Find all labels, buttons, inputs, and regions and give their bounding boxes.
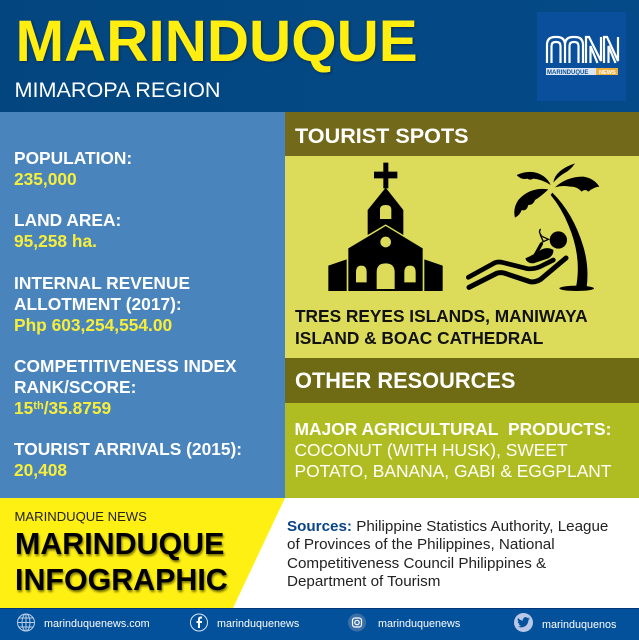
- heading: tourist spots: TOURIST SPOTS: [295, 123, 469, 148]
- panel: other resources: [285, 403, 639, 498]
- icon: instagram: [348, 614, 366, 632]
- agricultural products text: COCONUT (WITH HUSK), SWEET: [294, 440, 568, 460]
- icon: globe: [17, 614, 35, 632]
- internal revenue allotment stat: INTERNAL REVENUE: [14, 273, 190, 293]
- instagram handle: marinduquenews: [378, 618, 460, 630]
- land area stat: 95,258 ha.: [14, 231, 97, 251]
- agricultural products text: [294, 419, 612, 481]
- banner title: [15, 527, 229, 597]
- header band: [0, 0, 639, 112]
- heading: other resources: [285, 358, 639, 403]
- land area stat: [14, 210, 121, 251]
- website: marinduquenews.com: [44, 618, 150, 630]
- twitter handle: marinduquenos: [542, 619, 616, 631]
- tourist arrivals stat: [14, 439, 242, 480]
- sources text: Department of Tourism: [287, 573, 440, 590]
- competitiveness index stat: COMPETITIVENESS INDEX: [14, 356, 237, 376]
- icon: facebook: [190, 614, 208, 632]
- competitiveness index stat: RANK/SCORE:: [14, 377, 136, 397]
- tourist spots text: ISLAND & BOAC CATHEDRAL: [295, 328, 543, 348]
- banner kicker: MARINDUQUE NEWS: [14, 509, 147, 524]
- footer: [0, 608, 639, 640]
- population stat: POPULATION:: [14, 148, 132, 168]
- agricultural products text: MAJOR AGRICULTURAL PRODUCTS:: [294, 419, 611, 439]
- population stat: [14, 148, 132, 189]
- panel: tourist spots: [285, 156, 639, 358]
- internal revenue allotment stat: ALLOTMENT (2017):: [14, 294, 182, 314]
- title: MARINDUQUE: [16, 9, 418, 74]
- tourist arrivals stat: 20,408: [14, 460, 67, 480]
- heading: tourist spots: [285, 112, 639, 156]
- logo: [537, 12, 626, 101]
- subtitle: MIMAROPA REGION: [14, 77, 220, 102]
- population stat: 235,000: [14, 169, 77, 189]
- sources text: Competitiveness Council Philippines &: [287, 555, 546, 572]
- sources text: [287, 518, 608, 590]
- banner: infographic label: [0, 498, 285, 608]
- agricultural products text: POTATO, BANANA, GABI & EGGPLANT: [294, 461, 611, 481]
- internal revenue allotment stat: Php 603,254,554.00: [14, 315, 172, 335]
- land area stat: LAND AREA:: [14, 210, 121, 230]
- competitiveness index stat: 15th/35.8759: [14, 398, 111, 418]
- logo: NEWS: [599, 70, 616, 76]
- internal revenue allotment stat: [14, 273, 190, 335]
- logo: MARINDUQUE: [547, 70, 588, 76]
- sources text: of Provinces of the Philippines, National: [287, 536, 555, 553]
- heading: other resources: OTHER RESOURCES: [295, 368, 515, 393]
- panel: key statistics: [0, 112, 285, 498]
- facebook handle: marinduquenews: [217, 618, 299, 630]
- banner title: INFOGRAPHIC: [15, 563, 228, 597]
- icon: church: [328, 163, 443, 291]
- banner title: MARINDUQUE: [15, 527, 224, 561]
- icon: twitter: [514, 613, 533, 632]
- sources text: Sources: Philippine Statistics Authority, League: [287, 518, 608, 535]
- icon: beach palm and lounger: [468, 163, 599, 291]
- tourist spots text: TRES REYES ISLANDS, MANIWAYA: [295, 306, 588, 326]
- competitiveness index stat: [14, 356, 237, 418]
- tourist arrivals stat: TOURIST ARRIVALS (2015):: [14, 439, 242, 459]
- tourist spots text: [295, 306, 588, 348]
